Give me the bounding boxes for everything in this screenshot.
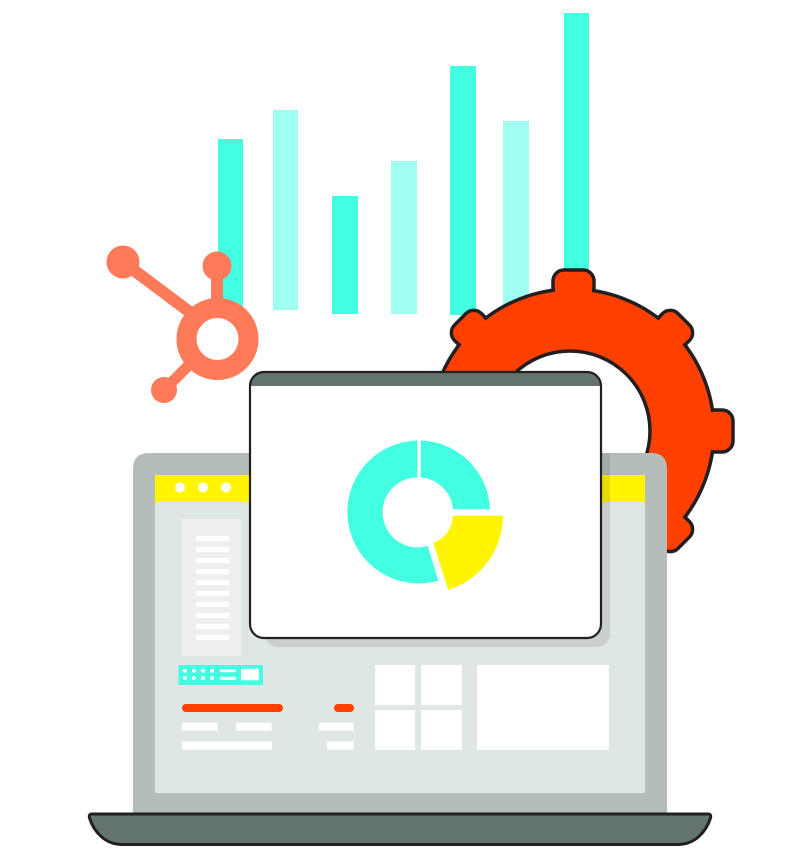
screen header bar (155, 475, 645, 502)
popup window (250, 372, 601, 638)
laptop (88, 453, 712, 846)
donut chart (347, 440, 503, 590)
laptop screen (155, 475, 645, 793)
window shadow (266, 453, 610, 647)
tile grid (375, 665, 462, 750)
laptop base (89, 814, 711, 844)
laptop lid body (133, 453, 667, 813)
sidebar list (182, 519, 241, 656)
table rows (182, 704, 354, 750)
window title bar (250, 372, 601, 386)
large content block (477, 665, 609, 750)
teal control panel (178, 665, 263, 685)
bar chart (218, 13, 589, 315)
icon: hubspot logo (106, 246, 248, 403)
illustration: laptop analytics dashboard (88, 13, 735, 846)
icon: gear (430, 270, 733, 573)
